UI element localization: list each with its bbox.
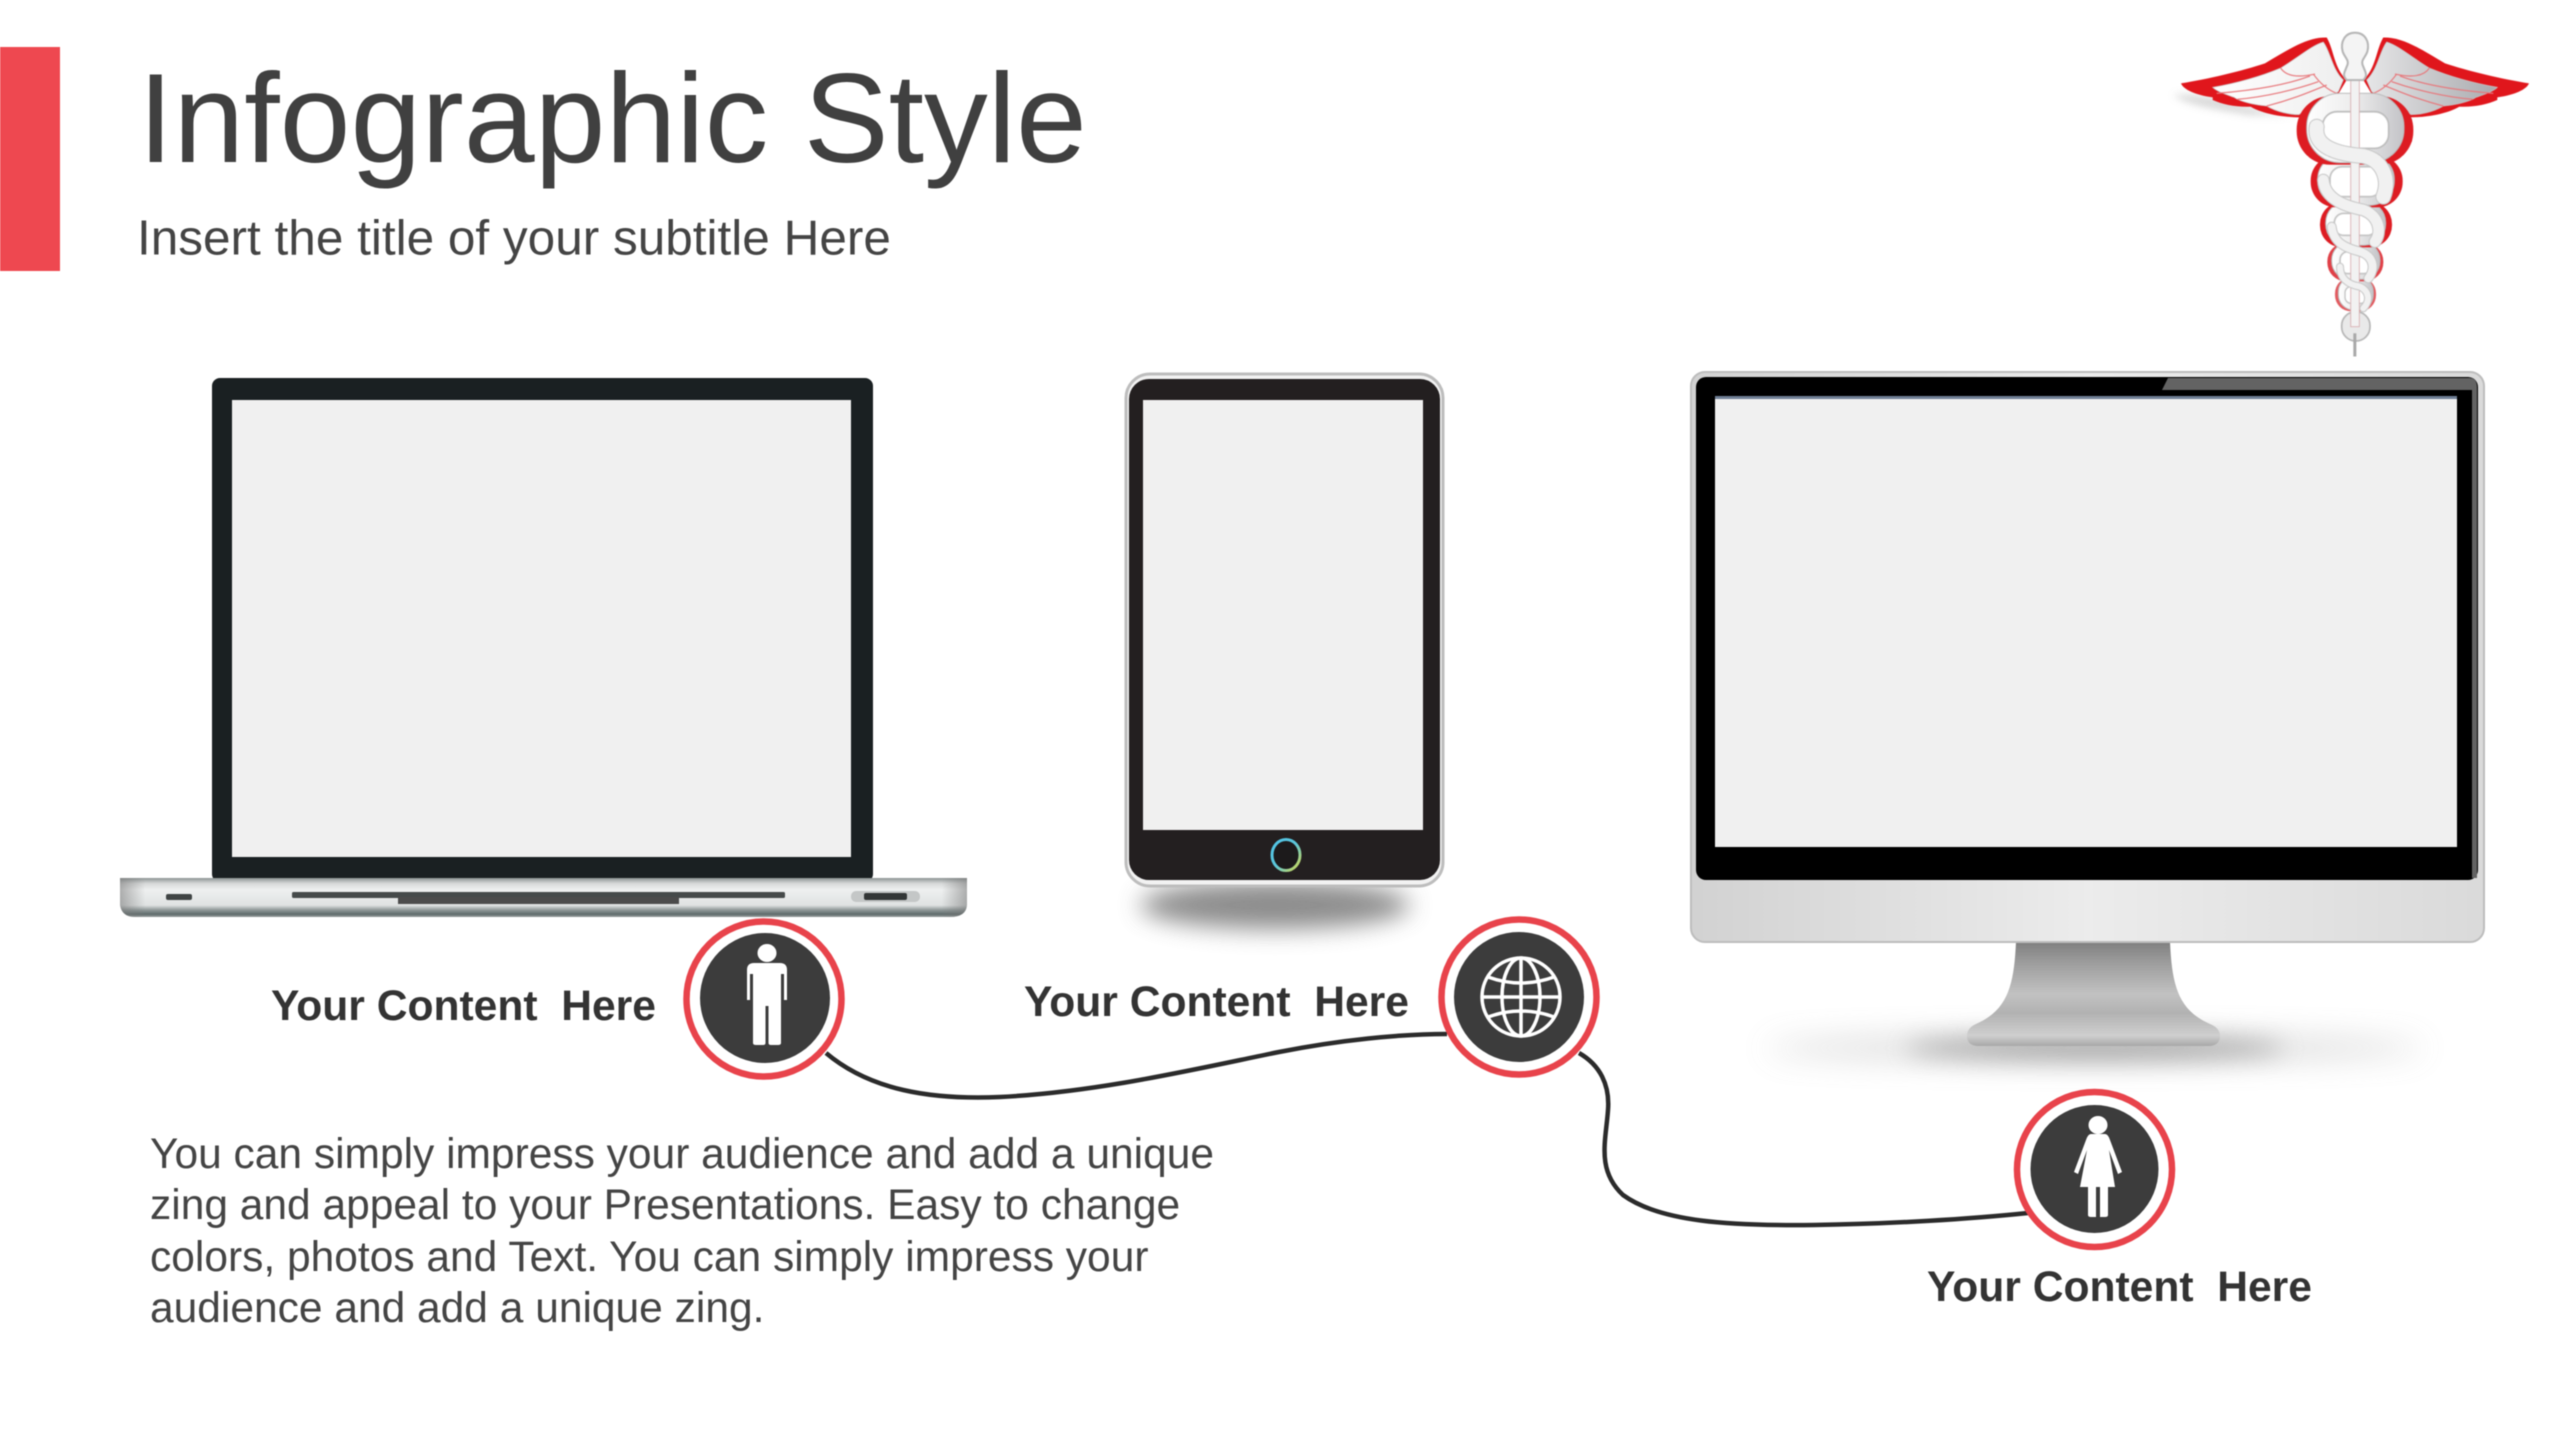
icon: woman figure — [2074, 1116, 2122, 1217]
dark disc — [1454, 932, 1584, 1062]
laptop lid — [212, 378, 873, 882]
icon: caduceus — [2173, 33, 2529, 357]
dark disc — [700, 933, 830, 1063]
monitor bezel — [1696, 377, 2478, 880]
red ring — [1442, 920, 1596, 1074]
laptop — [120, 378, 967, 917]
body paragraph: colors, photos and Text. You can simply impress your — [150, 1234, 1148, 1281]
monitor screen top edge — [1715, 396, 2457, 399]
tablet home button — [1272, 840, 1300, 870]
monitor glare — [2162, 378, 2477, 878]
title: Infographic Style — [138, 47, 1087, 189]
icon: globe — [1482, 958, 1560, 1036]
connector line 1 — [826, 1034, 1447, 1097]
red ring — [2017, 1092, 2172, 1247]
connector line 2 — [1579, 1053, 2028, 1225]
icon: man figure — [747, 944, 787, 1045]
staff head — [2342, 33, 2368, 80]
laptop base — [120, 878, 967, 917]
red ring — [686, 922, 842, 1076]
dark disc — [2030, 1105, 2158, 1233]
tablet — [1126, 374, 1443, 929]
monitor shadow — [1765, 1038, 2425, 1058]
monitor inner shadow — [1905, 1036, 2285, 1060]
badge: woman — [2017, 1092, 2172, 1247]
laptop base edge shading — [120, 878, 967, 917]
subtitle: Insert the title of your subtitle Here — [137, 210, 891, 266]
right wing — [2363, 37, 2529, 117]
tablet screen — [1143, 400, 1423, 830]
staff — [2351, 80, 2359, 357]
serpent bands — [2316, 127, 2386, 308]
laptop slot — [292, 892, 785, 898]
tablet bezel — [1129, 379, 1440, 880]
badge: globe — [1442, 920, 1596, 1074]
label: content 3: Your Content Here — [1927, 1263, 2312, 1311]
tablet casing — [1126, 374, 1443, 886]
body paragraph: audience and add a unique zing. — [150, 1285, 764, 1332]
monitor casing — [1691, 372, 2484, 942]
monitor stand — [1967, 942, 2220, 1046]
laptop left port — [166, 894, 192, 900]
body paragraph: You can simply impress your audience and add a unique — [150, 1131, 1214, 1178]
monitor — [1691, 372, 2484, 1060]
left wing — [2181, 37, 2347, 117]
wing shadow — [2173, 95, 2297, 115]
monitor screen — [1715, 399, 2457, 847]
tablet shadow — [1140, 881, 1410, 929]
red accent bar — [0, 47, 60, 271]
body paragraph: zing and appeal to your Presentations. Easy to change — [150, 1182, 1180, 1229]
label: content 2: Your Content Here — [1024, 978, 1409, 1026]
badge: man — [686, 922, 842, 1076]
serpent coils — [2297, 93, 2413, 341]
laptop screen — [232, 400, 851, 857]
label: content 1: Your Content Here — [271, 982, 656, 1030]
laptop hinge notch — [398, 897, 679, 904]
laptop right port — [851, 891, 920, 902]
